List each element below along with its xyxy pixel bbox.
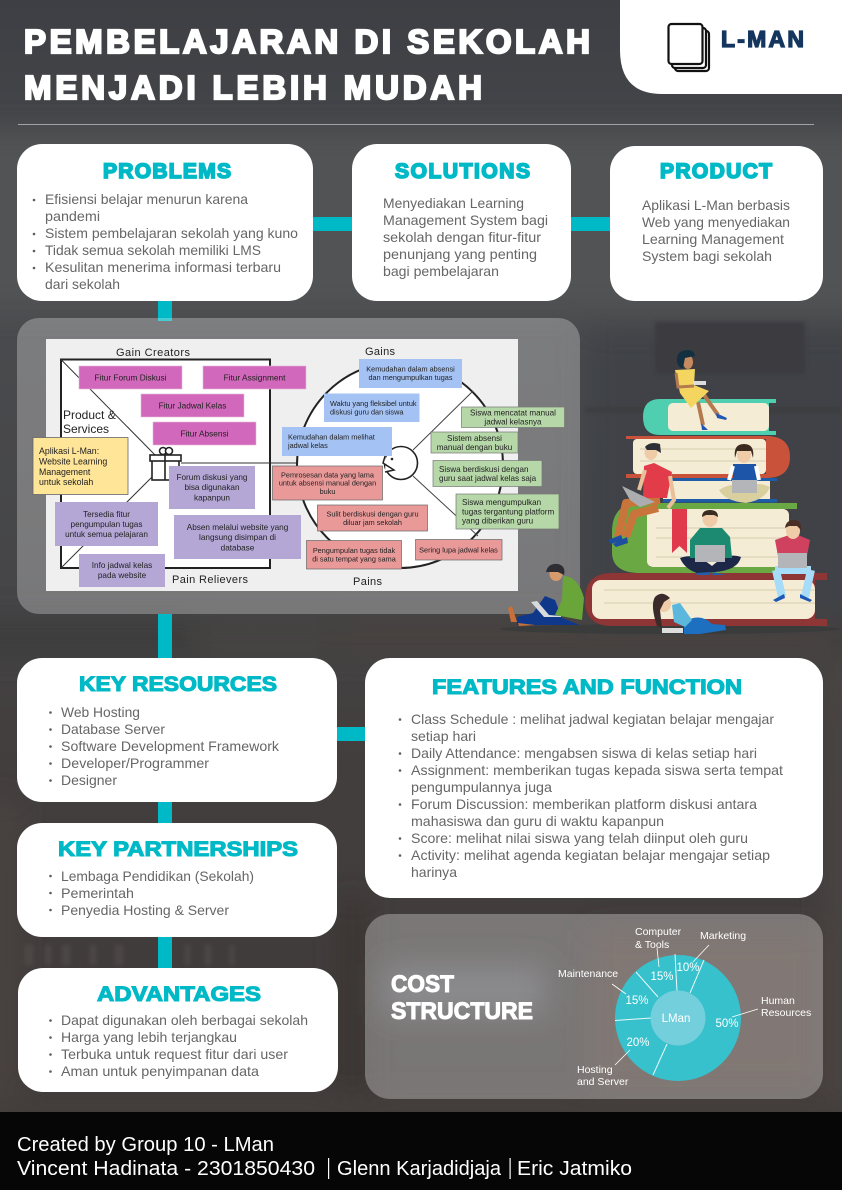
chart percentages: 20%: [626, 1037, 650, 1049]
pain boxes: buku: [320, 487, 335, 496]
features list: Forum Discussion: memberikan platform diskusi antara: [411, 796, 757, 812]
features list: setiap hari: [411, 728, 476, 744]
chart labels: Hosting: [577, 1064, 613, 1076]
key partnerships list: Penyedia Hosting & Server: [61, 902, 229, 918]
pain boxes: untuk absensi manual dengan: [279, 478, 376, 488]
gain boxes: jadwal kelas: [287, 441, 328, 450]
pain reliever boxes: [55, 466, 301, 587]
advantages list: Terbuka untuk request fitur dari user: [61, 1046, 288, 1062]
chart percentages: 15%: [625, 995, 649, 1007]
features list: [399, 711, 783, 880]
heading: features and function: FEATURES AND FUNCTION: [432, 676, 742, 699]
illustration: students on books: [500, 350, 840, 634]
chart leaders: [612, 945, 758, 1065]
features list: pengumpulannya juga: [411, 779, 552, 795]
canvas section titles: Gains: [365, 346, 396, 358]
solutions text: [383, 195, 548, 279]
chart labels: Marketing: [700, 930, 746, 942]
canvas section titles: Gain Creators: [116, 347, 190, 359]
problems list: Kesulitan menerima informasi terbaru: [45, 259, 281, 275]
gain reliever green boxes: Sistem absensi: [447, 434, 502, 443]
product square: [61, 360, 382, 568]
product text: System bagi sekolah: [642, 248, 772, 264]
solutions text: penunjang yang penting: [383, 246, 537, 262]
features list: Daily Attendance: mengabsen siswa di kelas setiap hari: [411, 745, 757, 761]
panel: value proposition canvas: [17, 318, 580, 614]
advantages list: Aman untuk penyimpanan data: [61, 1063, 259, 1079]
icon: stacked pages: [668, 24, 709, 71]
gain reliever green boxes: manual dengan buku: [437, 443, 512, 452]
key resources list: Database Server: [61, 721, 165, 737]
solutions text: Management System bagi: [383, 212, 548, 228]
problems list: [33, 191, 298, 292]
gain creator boxes: [79, 366, 306, 445]
solutions text: sekolah dengan fitur-fitur: [383, 229, 541, 245]
pain boxes: [272, 466, 502, 569]
pain reliever boxes: database: [221, 544, 255, 552]
footer: [0, 1112, 842, 1190]
problems list: Tidak semua sekolah memiliki LMS: [45, 242, 261, 258]
features list: Class Schedule : melihat jadwal kegiatan belajar mengajar: [411, 711, 774, 727]
heading: solutions: SOLUTIONS: [395, 160, 530, 183]
footer credits: Eric Jatmiko: [517, 1158, 632, 1180]
footer credits: Created by Group 10 - LMan: [17, 1134, 274, 1156]
pain boxes: Sulit berdiskusi dengan guru: [326, 510, 419, 518]
person: girl lying down: [653, 594, 726, 634]
key partnerships list: [49, 868, 254, 918]
canvas section titles: [63, 346, 396, 588]
chart percentages: 15%: [650, 971, 674, 983]
pain reliever boxes: Tersedia fitur: [83, 510, 130, 519]
gain reliever green boxes: Siswa mengumpulkan: [462, 498, 541, 507]
logo wordmark: L-MAN: [721, 26, 804, 52]
gain boxes: Kemudahan dalam absensi: [366, 364, 455, 374]
footer credits: Glenn Karjadidjaja: [337, 1158, 502, 1180]
gain boxes: Kemudahan dalam melihat: [288, 432, 375, 442]
features list: mahasiswa dan guru di waktu kapanpun: [411, 813, 664, 829]
key resources list: Software Development Framework: [61, 738, 280, 754]
problems list: dari sekolah: [45, 276, 120, 292]
gain boxes: diskusi guru dan siswa: [330, 408, 404, 416]
panel: product: [610, 146, 823, 301]
chart labels: [558, 926, 811, 1088]
heading: cost structure: STRUCTURE: [391, 998, 533, 1025]
panel: cost structure: [365, 914, 823, 1099]
key resources list: Developer/Programmer: [61, 755, 209, 771]
heading: key resources: KEY RESOURCES: [79, 673, 277, 696]
chart labels: Computer: [635, 926, 682, 938]
features list: harinya: [411, 864, 457, 880]
chart percentages: 50%: [715, 1018, 739, 1030]
logo panel: [620, 0, 842, 94]
canvas section titles: Pains: [353, 576, 382, 588]
pain reliever boxes: Absen melalui website yang: [187, 523, 289, 532]
chart labels: Maintenance: [558, 968, 618, 980]
panel: problems: [17, 144, 313, 301]
chart labels: Human: [761, 995, 795, 1007]
gain boxes: [282, 359, 462, 456]
problems list: Sistem pembelajaran sekolah yang kuno: [45, 225, 298, 241]
book: green: [612, 503, 797, 573]
gain creator boxes: Fitur Forum Diskusi: [95, 372, 167, 382]
canvas section titles: Product &: [63, 408, 116, 422]
features list: Score: melihat nilai siswa yang telah diinput oleh guru: [411, 830, 748, 846]
title: PEMBELAJARAN DI SEKOLAH: [24, 23, 590, 60]
pain reliever boxes: pada website: [98, 571, 147, 580]
yellow product note: Website Learning: [39, 456, 107, 466]
gain reliever green boxes: guru saat jadwal kelas saja: [439, 474, 537, 483]
canvas section titles: Pain Relievers: [172, 574, 248, 586]
book: maroon bottom: [585, 573, 827, 626]
key partnerships list: Pemerintah: [61, 885, 134, 901]
gain creator boxes: Fitur Jadwal Kelas: [159, 400, 226, 410]
yellow product note: [33, 438, 128, 494]
pain boxes: di satu tempat yang sama: [312, 554, 397, 564]
product text: [642, 197, 790, 264]
pain boxes: Pemrosesan data yang lama: [281, 470, 375, 480]
bookmark: [672, 509, 687, 553]
advantages list: [49, 1012, 308, 1079]
gain reliever green boxes: yang diberikan guru: [462, 516, 533, 526]
problems list: pandemi: [45, 208, 100, 224]
key resources list: Designer: [61, 772, 117, 788]
pain reliever boxes: bisa digunakan: [184, 483, 240, 492]
pain reliever boxes: langsung disimpan di: [199, 533, 276, 542]
heading: problems: PROBLEMS: [103, 160, 231, 183]
person: woman in yellow: [675, 350, 727, 430]
chart percentages: 10%: [676, 962, 700, 974]
gain reliever green boxes: jadwal kelasnya: [483, 418, 542, 426]
title: MENJADI LEBIH MUDAH: [24, 69, 482, 106]
book: teal: [643, 399, 776, 435]
features list: Activity: melihat agenda kegiatan belajar mengajar setiap: [411, 847, 770, 863]
yellow product note: untuk sekolah: [39, 477, 93, 487]
gain boxes: Waktu yang fleksibel untuk: [330, 399, 417, 408]
book: blue: [663, 478, 777, 502]
donut chart: [615, 954, 741, 1081]
key resources list: Web Hosting: [61, 704, 140, 720]
person: man in pink shirt: [773, 520, 812, 602]
heading: cost structure: COST: [391, 971, 454, 998]
pain reliever boxes: Info jadwal kelas: [92, 561, 152, 570]
panel: advantages: [18, 968, 338, 1092]
heading: key partnerships: KEY PARTNERSHIPS: [58, 838, 298, 861]
gain reliever green boxes: tugas tergantung platform: [462, 508, 554, 516]
connectors: [158, 217, 610, 968]
donut chart: LMan: [662, 1013, 690, 1025]
gain reliever green boxes: [431, 407, 564, 529]
pain reliever boxes: kapanpun: [194, 494, 230, 502]
panel: features and function: [365, 658, 823, 898]
solutions text: Menyediakan Learning: [383, 195, 524, 211]
solutions text: bagi pembelajaran: [383, 263, 499, 279]
key resources list: [49, 704, 280, 788]
product text: Web yang menyediakan: [642, 214, 790, 230]
features list: Assignment: memberikan tugas kepada siswa serta tempat: [411, 762, 783, 778]
problems list: Efisiensi belajar menurun karena: [45, 191, 248, 207]
heading: cost structure: [391, 971, 533, 1025]
pain boxes: Pengumpulan tugas tidak: [313, 546, 396, 555]
icon: gift: [150, 448, 181, 480]
panel: key resources: [17, 658, 337, 802]
book: red: [626, 436, 790, 478]
title: [24, 23, 590, 106]
pain boxes: diluar jam sekolah: [343, 518, 402, 527]
pain reliever boxes: Forum diskusi yang: [176, 473, 248, 482]
person: man in green sweater: [680, 510, 741, 575]
person: man in red: [608, 443, 674, 547]
product text: Learning Management: [642, 231, 784, 247]
person: girl in blue vest: [719, 444, 770, 503]
pain boxes: Sering lupa jadwal kelas: [419, 546, 498, 554]
gain creator boxes: Fitur Absensi: [181, 428, 229, 438]
pain reliever boxes: pengumpulan tugas: [71, 520, 142, 529]
pain reliever boxes: untuk semua pelajaran: [65, 530, 148, 539]
yellow product note: Management: [39, 467, 91, 477]
key partnerships list: Lembaga Pendidikan (Sekolah): [61, 868, 254, 884]
footer credits: Vincent Hadinata - 2301850430: [17, 1158, 315, 1180]
yellow product note: Aplikasi L-Man:: [39, 446, 99, 456]
gain reliever green boxes: Siswa mencatat manual: [470, 408, 556, 418]
gain boxes: dan mengumpulkan tugas: [369, 373, 453, 382]
gain reliever green boxes: Siswa berdiskusi dengan: [439, 465, 529, 474]
person: man in green hoodie: [508, 564, 584, 626]
advantages list: Dapat digunakan oleh berbagai sekolah: [61, 1012, 308, 1028]
chart labels: Resources: [761, 1007, 811, 1019]
panel: solutions: [352, 144, 571, 301]
heading: advantages: ADVANTAGES: [97, 983, 261, 1006]
canvas sheet: [46, 339, 518, 591]
panel: key partnerships: [17, 823, 337, 937]
customer circle: [297, 362, 503, 568]
product text: Aplikasi L-Man berbasis: [642, 197, 790, 213]
footer credits: [17, 1134, 632, 1180]
canvas section titles: Services: [63, 422, 109, 436]
chart labels: and Server: [577, 1076, 629, 1088]
gain creator boxes: Fitur Assignment: [224, 372, 286, 382]
heading: product: PRODUCT: [660, 160, 772, 183]
advantages list: Harga yang lebih terjangkau: [61, 1029, 237, 1045]
chart percentages: [625, 962, 739, 1049]
chart labels: & Tools: [635, 939, 669, 951]
